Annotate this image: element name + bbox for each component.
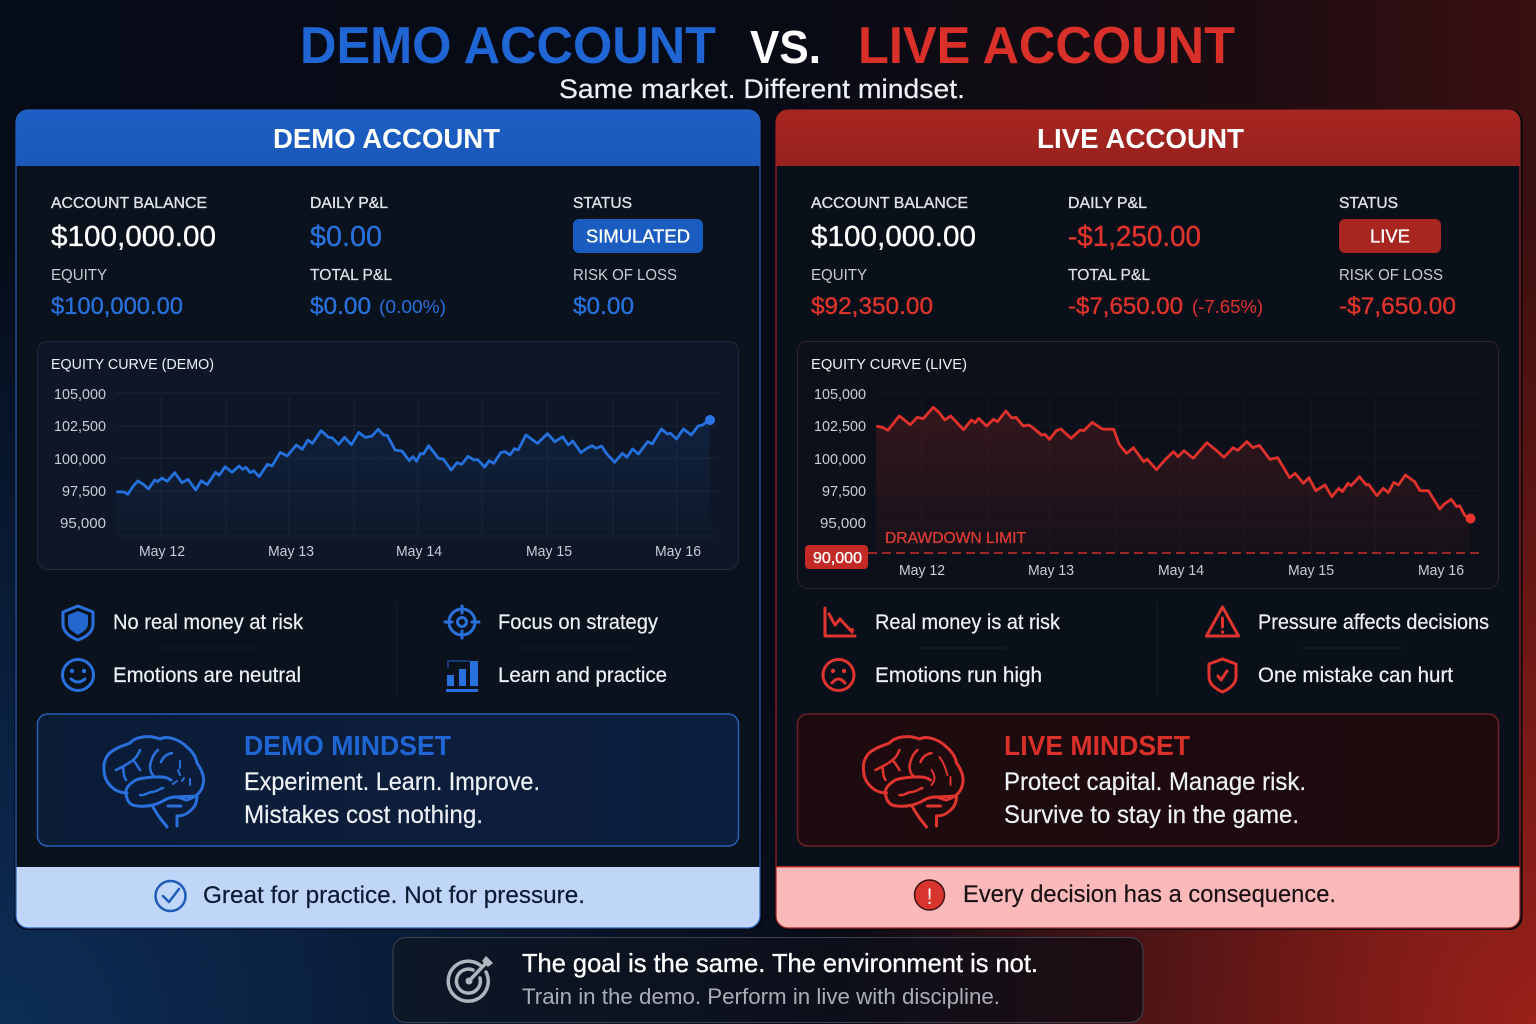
banner: great for practice: Great for practice. Not for pressure. (203, 882, 585, 909)
stat: status simulated: SIMULATED (586, 226, 690, 246)
stat: status live: STATUS (1339, 195, 1398, 212)
panel background: live (776, 110, 1520, 928)
chart: demo equity curve: May 16 (655, 543, 701, 560)
chart: live equity curve: 97,500 (822, 483, 866, 500)
title: DEMO ACCOUNT (300, 17, 716, 75)
chart: demo equity curve: May 15 (526, 543, 572, 560)
feature: one mistake can hurt: One mistake can hurt (1258, 664, 1453, 687)
chart: demo equity curve: 102,500 (54, 418, 106, 435)
stat: total p&l: (-7.65%) (1192, 297, 1263, 317)
icon: target with arrow (448, 957, 492, 1001)
chart: demo equity curve: EQUITY CURVE (DEMO) (51, 356, 214, 373)
panel shadow: live (774, 109, 1522, 930)
feature: focus on strategy (445, 606, 658, 638)
title: VS. (750, 21, 821, 73)
callout: demo mindset: DEMO MINDSET (244, 730, 451, 761)
chart: live equity curve: 105,000 (814, 386, 866, 403)
panel background: demo (16, 110, 760, 928)
stat: daily p&l (310, 195, 388, 253)
stat: daily p&l: DAILY P&L (310, 195, 388, 212)
feature: no real money at risk (63, 606, 303, 640)
callout: live mindset: Survive to stay in the game. (1004, 801, 1299, 829)
callout: demo mindset: Mistakes cost nothing. (244, 801, 483, 829)
feature: learn and practice: Learn and practice (498, 664, 667, 687)
chart: live equity curve: May 14 (1158, 562, 1204, 579)
stat: risk of loss: -$7,650.00 (1339, 293, 1456, 320)
callout: demo mindset (38, 714, 738, 846)
stat: risk of loss (1339, 267, 1456, 320)
chart: demo equity curve: May 14 (396, 543, 442, 560)
callout: live mindset (798, 714, 1498, 846)
panel header: demo (16, 110, 760, 166)
callout: live mindset: Protect capital. Manage risk. (1004, 768, 1306, 796)
stat: account balance (811, 195, 976, 253)
feature: pressure affects decisions (1206, 607, 1489, 636)
feature: emotions are neutral (62, 660, 301, 690)
stat: equity: EQUITY (51, 267, 107, 284)
stat: daily p&l (1068, 195, 1201, 253)
stat: equity (51, 267, 183, 320)
panel header: demo: DEMO ACCOUNT (273, 123, 500, 154)
panel border: demo (16, 110, 760, 928)
title (300, 17, 1235, 75)
chart: live equity curve: May 12 (899, 562, 945, 579)
icon: brain (863, 737, 963, 827)
chart: demo equity curve: May 12 (139, 543, 185, 560)
stat: equity: $100,000.00 (51, 293, 183, 320)
stat: risk of loss: RISK OF LOSS (573, 267, 677, 284)
banner: great for practice (16, 867, 760, 928)
feature: emotions run high (823, 660, 1042, 690)
stat: total p&l: TOTAL P&L (310, 267, 392, 284)
subtitle: Same market. Different mindset. (559, 74, 965, 104)
stat: risk of loss: RISK OF LOSS (1339, 267, 1443, 284)
feature: emotions run high: Emotions run high (875, 664, 1042, 687)
chart: live equity curve: EQUITY CURVE (LIVE) (811, 356, 967, 373)
stat: daily p&l: -$1,250.00 (1068, 221, 1201, 253)
chart: live equity curve: 102,500 (814, 418, 866, 435)
stat: status live (1339, 195, 1441, 253)
chart: live equity curve: 95,000 (820, 515, 866, 532)
stat: total p&l (1068, 267, 1263, 320)
callout: the goal: Train in the demo. Perform in live with discipline. (522, 984, 1000, 1009)
stat: risk of loss (573, 267, 677, 320)
panel header: live: LIVE ACCOUNT (1037, 123, 1244, 154)
banner: every decision has a consequence: Every decision has a consequence. (963, 881, 1336, 908)
panel border: live (776, 110, 1520, 928)
stat: daily p&l: DAILY P&L (1068, 195, 1147, 212)
stat: total p&l (310, 267, 446, 320)
icon: brain (104, 737, 204, 827)
banner: every decision has a consequence (776, 866, 1520, 928)
stat: equity (811, 267, 933, 320)
stat: status simulated (573, 195, 703, 253)
stat: daily p&l: $0.00 (310, 221, 382, 253)
chart: demo equity curve: May 13 (268, 543, 314, 560)
stat: account balance: $100,000.00 (811, 221, 976, 253)
stat: status simulated: STATUS (573, 195, 632, 212)
title: LIVE ACCOUNT (858, 17, 1235, 75)
feature: focus on strategy: Focus on strategy (498, 611, 658, 634)
panel header: live (776, 110, 1520, 166)
chart: demo equity curve: 105,000 (54, 386, 106, 403)
stat: account balance: ACCOUNT BALANCE (811, 195, 968, 212)
chart: live equity curve: May 13 (1028, 562, 1074, 579)
callout: demo mindset: Experiment. Learn. Improve. (244, 768, 540, 796)
feature: one mistake can hurt (1209, 659, 1453, 692)
banner: every decision has a consequence: ! (926, 884, 933, 909)
feature: real money is at risk: Real money is at risk (875, 611, 1060, 634)
panel shadow: demo (14, 109, 762, 930)
callout: live mindset: LIVE MINDSET (1004, 730, 1190, 761)
feature: real money is at risk (825, 608, 1060, 636)
chart: demo equity curve: 95,000 (60, 515, 106, 532)
feature: emotions are neutral: Emotions are neutral (113, 664, 301, 687)
chart: live equity curve: 90,000 (813, 550, 862, 567)
panel: demo account (14, 109, 762, 930)
chart: live equity curve: DRAWDOWN LIMIT (885, 530, 1027, 547)
stat: status live: LIVE (1370, 226, 1410, 246)
stat: total p&l: (0.00%) (379, 297, 446, 317)
chart: live equity curve (798, 342, 1498, 588)
stat: total p&l: $0.00 (310, 293, 371, 320)
feature: pressure affects decisions: Pressure affects decisions (1258, 611, 1489, 634)
stat: equity: $92,350.00 (811, 293, 933, 320)
stat: account balance (51, 195, 216, 253)
chart: live equity curve: 100,000 (814, 451, 866, 468)
feature: no real money at risk: No real money at risk (113, 611, 303, 634)
callout: the goal: The goal is the same. The environment is not. (522, 948, 1038, 978)
chart: live equity curve: May 16 (1418, 562, 1464, 579)
stat: risk of loss: $0.00 (573, 293, 634, 320)
stat: equity: EQUITY (811, 267, 867, 284)
chart: demo equity curve (38, 342, 738, 570)
chart: demo equity curve: 100,000 (54, 451, 106, 468)
chart: live equity curve: May 15 (1288, 562, 1334, 579)
feature: learn and practice (446, 661, 667, 692)
panel: live account (774, 109, 1522, 930)
stat: account balance: $100,000.00 (51, 221, 216, 253)
stat: total p&l: TOTAL P&L (1068, 267, 1150, 284)
chart: demo equity curve: 97,500 (62, 483, 106, 500)
callout: the goal (393, 938, 1143, 1022)
stat: account balance: ACCOUNT BALANCE (51, 195, 207, 212)
stat: total p&l: -$7,650.00 (1068, 293, 1183, 320)
